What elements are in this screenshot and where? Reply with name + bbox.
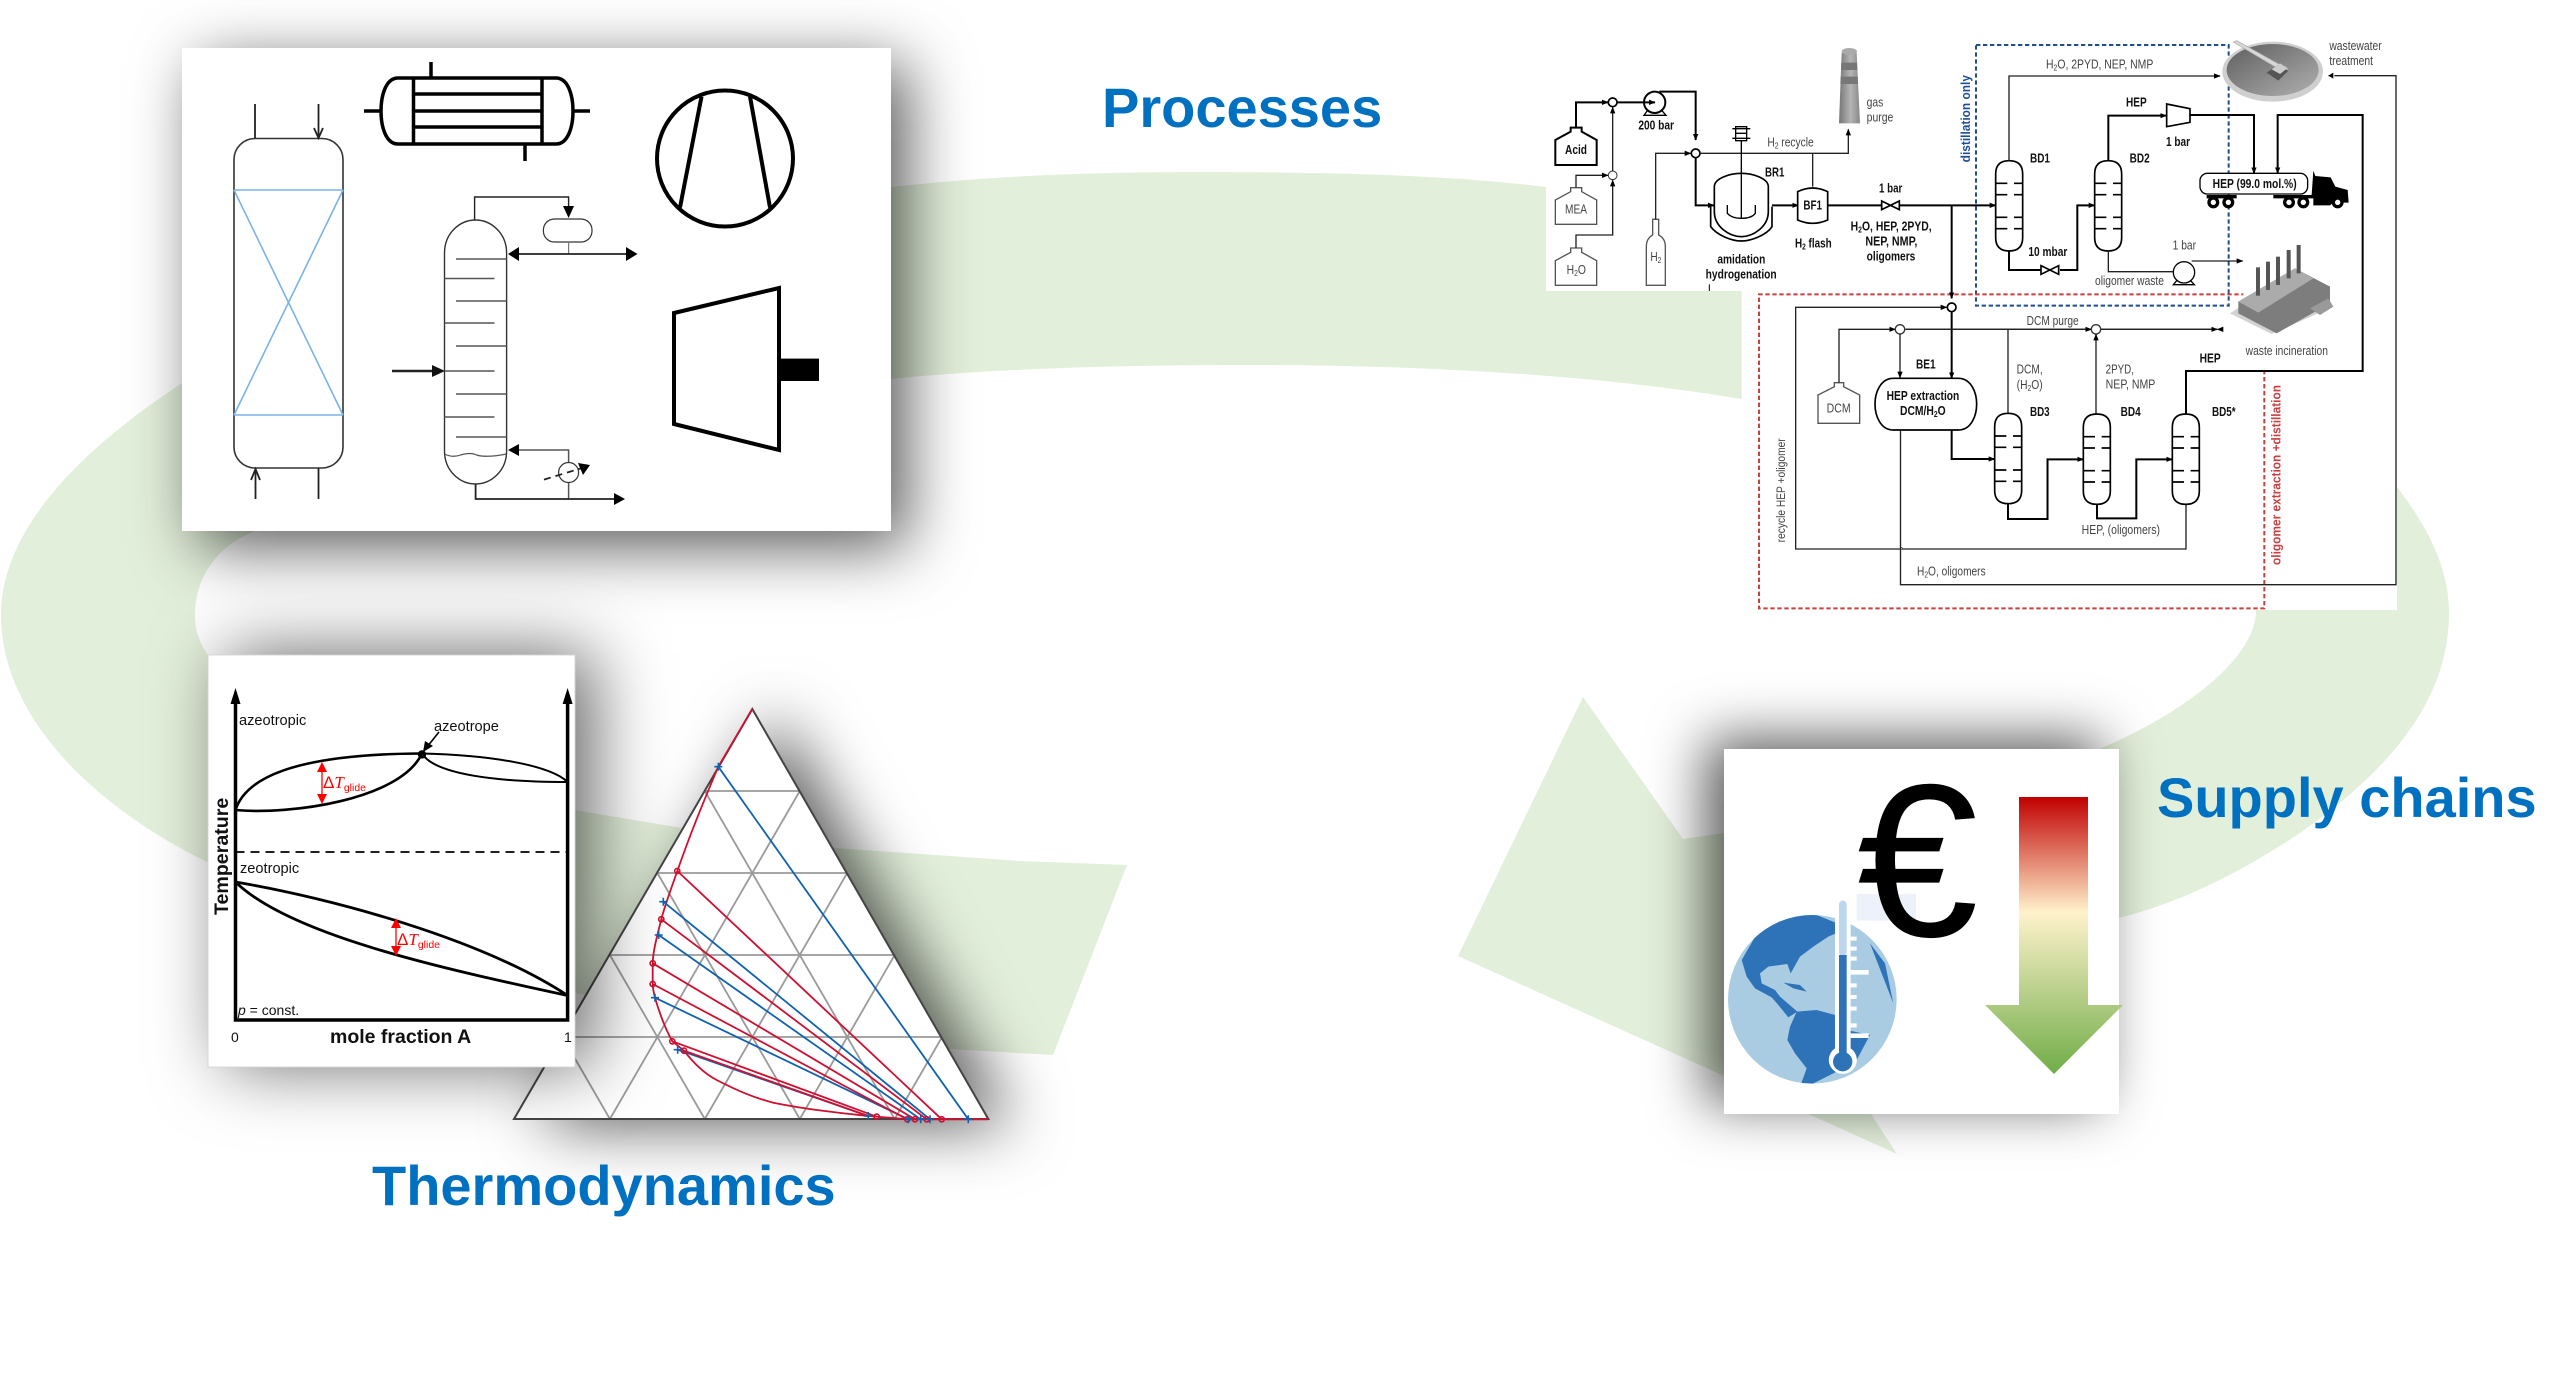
reactor BR1: BR1 — [1765, 166, 1784, 180]
feed line and valve: NEP, NMP, — [1865, 235, 1917, 249]
chart labels: mole fraction A — [330, 1026, 471, 1048]
azeotrope point and pointer — [418, 732, 439, 759]
divider between regimes — [236, 851, 568, 853]
azeotropic curves — [236, 754, 568, 811]
HEP product compressor and truck: HEP — [2126, 96, 2147, 110]
HEP product compressor and truck — [2108, 96, 2363, 414]
feed vessels and pump: O — [1578, 263, 1586, 277]
hydrogen recycle and gas purge: recycle — [1778, 136, 1814, 150]
chart labels — [211, 713, 572, 1048]
chart labels: zeotropic — [240, 861, 299, 877]
distillation columns BD3, BD4 and BD5: BD4 — [2121, 405, 2141, 419]
feed vessels and pump: 2 — [1574, 268, 1578, 278]
tie lines: blue — [655, 767, 968, 1119]
oligomer waste pump: oligomer waste — [2095, 274, 2164, 288]
flash BF1: 2 — [1802, 241, 1806, 251]
panel: temperature vs mole fraction chart — [208, 655, 575, 1067]
icon: packed column — [234, 104, 343, 499]
feed line and valve: 2 — [1858, 225, 1862, 235]
wastewater treatment: wastewater — [2329, 39, 2382, 53]
DCM purge stream: 2PYD, — [2106, 362, 2134, 376]
feed vessels and pump: Acid — [1565, 143, 1587, 157]
region: oligomer extraction plus distillation: oligomer extraction +distillation — [2270, 385, 2284, 565]
waste incineration plant — [2230, 245, 2333, 358]
feed line and valve: 1 bar — [1879, 182, 1902, 196]
reactor BR1 — [1696, 127, 1784, 291]
arrow: decreasing cost and impact — [1985, 797, 2123, 1074]
ternary grid — [562, 791, 942, 1119]
distillation columns BD1 and BD2: H — [2046, 58, 2055, 72]
temperature glide marker: zeotropic: glide — [418, 939, 440, 951]
temperature glide marker: azeotropic: glide — [344, 782, 366, 794]
chart labels: p = const. — [237, 1002, 299, 1018]
heading: Thermodynamics: Thermodynamics — [372, 1154, 836, 1217]
panel: ternary phase diagram — [514, 709, 988, 1123]
globe with thermometer — [1728, 894, 1916, 1087]
chart labels: azeotrope — [434, 719, 499, 735]
waste incineration plant: waste incineration — [2245, 344, 2328, 358]
recycle junction and extraction unit BE1: BE1 — [1916, 357, 1936, 371]
distillation columns BD3, BD4 and BD5: O, oligomers — [1928, 565, 1986, 579]
flash BF1 — [1772, 153, 1832, 251]
distillation columns BD3, BD4 and BD5: HEP — [2200, 352, 2221, 366]
DCM purge stream: (H — [2017, 378, 2030, 392]
distillation columns BD3, BD4 and BD5: HEP, (oligomers) — [2082, 523, 2160, 537]
chart axes — [230, 688, 573, 1020]
feed vessels and pump: H — [1650, 250, 1659, 264]
feed vessels and pump: H — [1567, 263, 1576, 277]
panel: process flowsheet — [1546, 30, 2397, 610]
region: distillation only: distillation only — [1959, 75, 1973, 162]
flash BF1: flash — [1806, 236, 1832, 250]
heading: Processes: Processes — [1102, 76, 1382, 139]
recycle junction and extraction unit BE1: recycle HEP +oligomer — [1774, 438, 1788, 542]
recycle junction and extraction unit BE1 — [1774, 303, 2217, 549]
recycle junction and extraction unit BE1: HEP extraction — [1887, 389, 1959, 403]
icon: distillation column — [392, 197, 638, 505]
DCM purge stream — [1906, 314, 2217, 414]
temperature glide marker: azeotropic — [317, 762, 366, 804]
region: oligomer extraction plus distillation — [1759, 294, 2284, 608]
DCM purge stream: NEP, NMP — [2106, 377, 2155, 391]
feed vessels and pump: 200 bar — [1638, 118, 1674, 132]
DCM purge stream: DCM purge — [2027, 314, 2079, 328]
chart labels: Temperature — [211, 798, 233, 915]
feed vessels and pump: MEA — [1565, 202, 1587, 216]
distillation columns BD1 and BD2: BD1 — [2030, 152, 2050, 166]
feed line and valve — [1828, 182, 1996, 298]
distillation columns BD3, BD4 and BD5: BD3 — [2030, 405, 2050, 419]
flash BF1: BF1 — [1803, 198, 1822, 212]
tie lines: red — [653, 871, 942, 1119]
distillation columns BD3, BD4 and BD5 — [1917, 352, 2236, 580]
panel: unit operation symbols — [182, 48, 891, 531]
distillation columns BD1 and BD2 — [1996, 58, 2220, 274]
HEP product compressor and truck: 1 bar — [2166, 135, 2190, 149]
binodal curve — [653, 709, 988, 1119]
hydrogen recycle and gas purge: purge — [1867, 111, 1893, 125]
DCM purge stream: 2 — [2027, 383, 2032, 393]
heading: Supply chains: Supply chains — [2157, 766, 2537, 829]
feed line and valve: H — [1851, 220, 1860, 234]
recycle junction and extraction unit BE1: 2 — [1934, 409, 1938, 419]
temperature glide marker: azeotropic: ΔT — [323, 773, 344, 792]
panel: supply chain costs and climate — [1724, 740, 2123, 1114]
chart labels: 1 — [564, 1029, 572, 1045]
tie line end markers: red — [650, 868, 944, 1122]
icon: shell and tube heat exchanger — [364, 62, 590, 161]
distillation columns BD3, BD4 and BD5: BD5* — [2212, 405, 2236, 419]
HEP product compressor and truck: HEP (99.0 mol.%) — [2213, 177, 2297, 191]
oligomer waste pump — [2095, 238, 2243, 288]
recycle junction and extraction unit BE1: DCM — [1827, 401, 1851, 415]
wastewater treatment: treatment — [2329, 54, 2373, 68]
distillation columns BD3, BD4 and BD5: 2 — [1924, 570, 1928, 580]
recycle junction and extraction unit BE1: DCM/H — [1900, 404, 1941, 418]
chart labels: 0 — [231, 1029, 239, 1045]
tie line end markers: blue — [651, 763, 972, 1123]
hydrogen recycle and gas purge: 2 — [1775, 141, 1779, 151]
DCM purge stream: DCM, — [2017, 362, 2043, 376]
reactor BR1: amidation — [1717, 252, 1765, 266]
flash BF1: H — [1795, 236, 1804, 250]
hydrogen recycle and gas purge — [1656, 48, 1893, 219]
arrow: processes to supply chains — [850, 172, 2449, 1154]
hydrogen recycle and gas purge: gas — [1867, 96, 1883, 110]
DCM purge stream: O) — [2031, 378, 2043, 392]
feed vessels and pump — [1555, 92, 1696, 285]
reactor BR1: hydrogenation — [1706, 267, 1777, 281]
hydrogen recycle and gas purge: H — [1767, 136, 1776, 150]
feed line and valve: oligomers — [1867, 250, 1915, 264]
triangle outline — [514, 709, 988, 1119]
distillation columns BD1 and BD2: 2 — [2054, 63, 2058, 73]
distillation columns BD1 and BD2: BD2 — [2130, 152, 2150, 166]
arrow: processes to thermodynamics loop — [1, 320, 1127, 1055]
wastewater treatment — [1900, 39, 2396, 585]
euro sign: € — [1857, 740, 1978, 983]
region: distillation only — [1959, 45, 2229, 306]
feed vessels and pump: 2 — [1658, 255, 1662, 265]
distillation columns BD1 and BD2: O, 2PYD, NEP, NMP — [2057, 58, 2153, 72]
icon: compressor — [657, 90, 793, 226]
temperature glide marker: zeotropic: ΔT — [397, 930, 418, 949]
chart labels: azeotropic — [239, 713, 306, 729]
zeotropic curves — [236, 882, 568, 996]
temperature glide marker: zeotropic — [391, 918, 440, 956]
feed line and valve: O, HEP, 2PYD, — [1862, 220, 1932, 234]
distillation columns BD3, BD4 and BD5: H — [1917, 565, 1926, 579]
recycle junction and extraction unit BE1: O — [1938, 404, 1946, 418]
icon: turbine — [674, 288, 819, 450]
distillation columns BD1 and BD2: 10 mbar — [2028, 245, 2067, 259]
oligomer waste pump: 1 bar — [2173, 238, 2196, 252]
